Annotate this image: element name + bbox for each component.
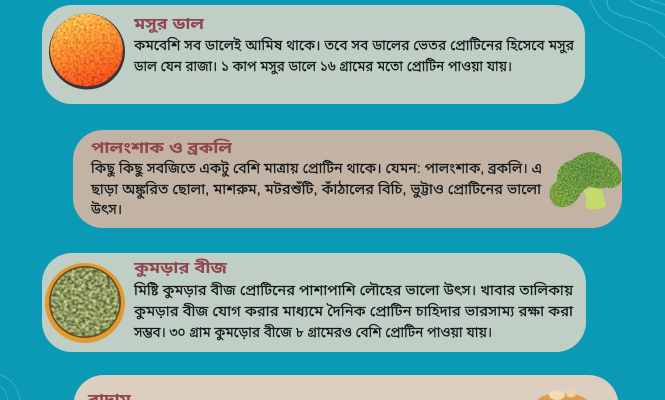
text block: masoor dal: ডাল যেন রাজা। ১ কাপ মসুর ডালে ১৬ গ্রামের মতো প্রোটিন পাওয়া যায়। [133,58,512,75]
icon: broccoli [549,152,622,209]
decorative contour lines, bottom left [0,375,20,400]
icon: nuts [536,390,588,400]
text block: masoor dal: কমবেশি সব ডালেই আমিষ থাকে। তবে সব ডালের ভেতর প্রোটিনের হিসেবে মসুর [133,37,575,54]
text block: pumpkin seeds: মিষ্টি কুমড়ার বীজ প্রোটিনের পাশাপাশি লৌহের ভালো উৎস। খাবার তালিকায় [133,282,573,299]
text block: spinach and broccoli [90,160,542,217]
heading: masoor dal: মসুর ডাল [133,16,205,34]
icon: bowl of pumpkin seeds [45,263,125,343]
heading: spinach and broccoli: পালংশাক ও ব্রকলি [91,139,233,157]
icon: bowl of red lentils [49,14,125,90]
text block: pumpkin seeds: কুমড়ার বীজ যোগ করার মাধ্যমে দৈনিক প্রোটিন চাহিদার ভারসাম্য রক্ষা করা [133,303,573,320]
panel: spinach and broccoli [73,130,622,228]
text block: spinach and broccoli: কিছু কিছু সবজিতে একটু বেশি মাত্রায় প্রোটিন থাকে। যেমন: পালংশাক, ব্রকলি। এ [90,160,542,177]
panel: masoor dal [42,5,585,104]
panel: pumpkin seeds [42,253,586,352]
text block: spinach and broccoli: উৎস। [90,201,122,217]
heading: pumpkin seeds: কুমড়ার বীজ [133,259,228,278]
panel: nuts [74,375,618,400]
text block: masoor dal [133,37,575,75]
text block: pumpkin seeds: সম্ভব। ৩০ গ্রাম কুমড়োর বীজে ৮ গ্রামেরও বেশি প্রোটিন পাওয়া যায়। [133,324,492,341]
text block: spinach and broccoli: ছাড়া অঙ্কুরিত ছোলা, মাশরুম, মটরশুঁটি, কাঁঠালের বিচি, ভুট্টাও প্রোটিনের ভালো [90,180,541,199]
text block: pumpkin seeds [133,282,573,341]
decorative contour lines, top right [590,0,665,58]
